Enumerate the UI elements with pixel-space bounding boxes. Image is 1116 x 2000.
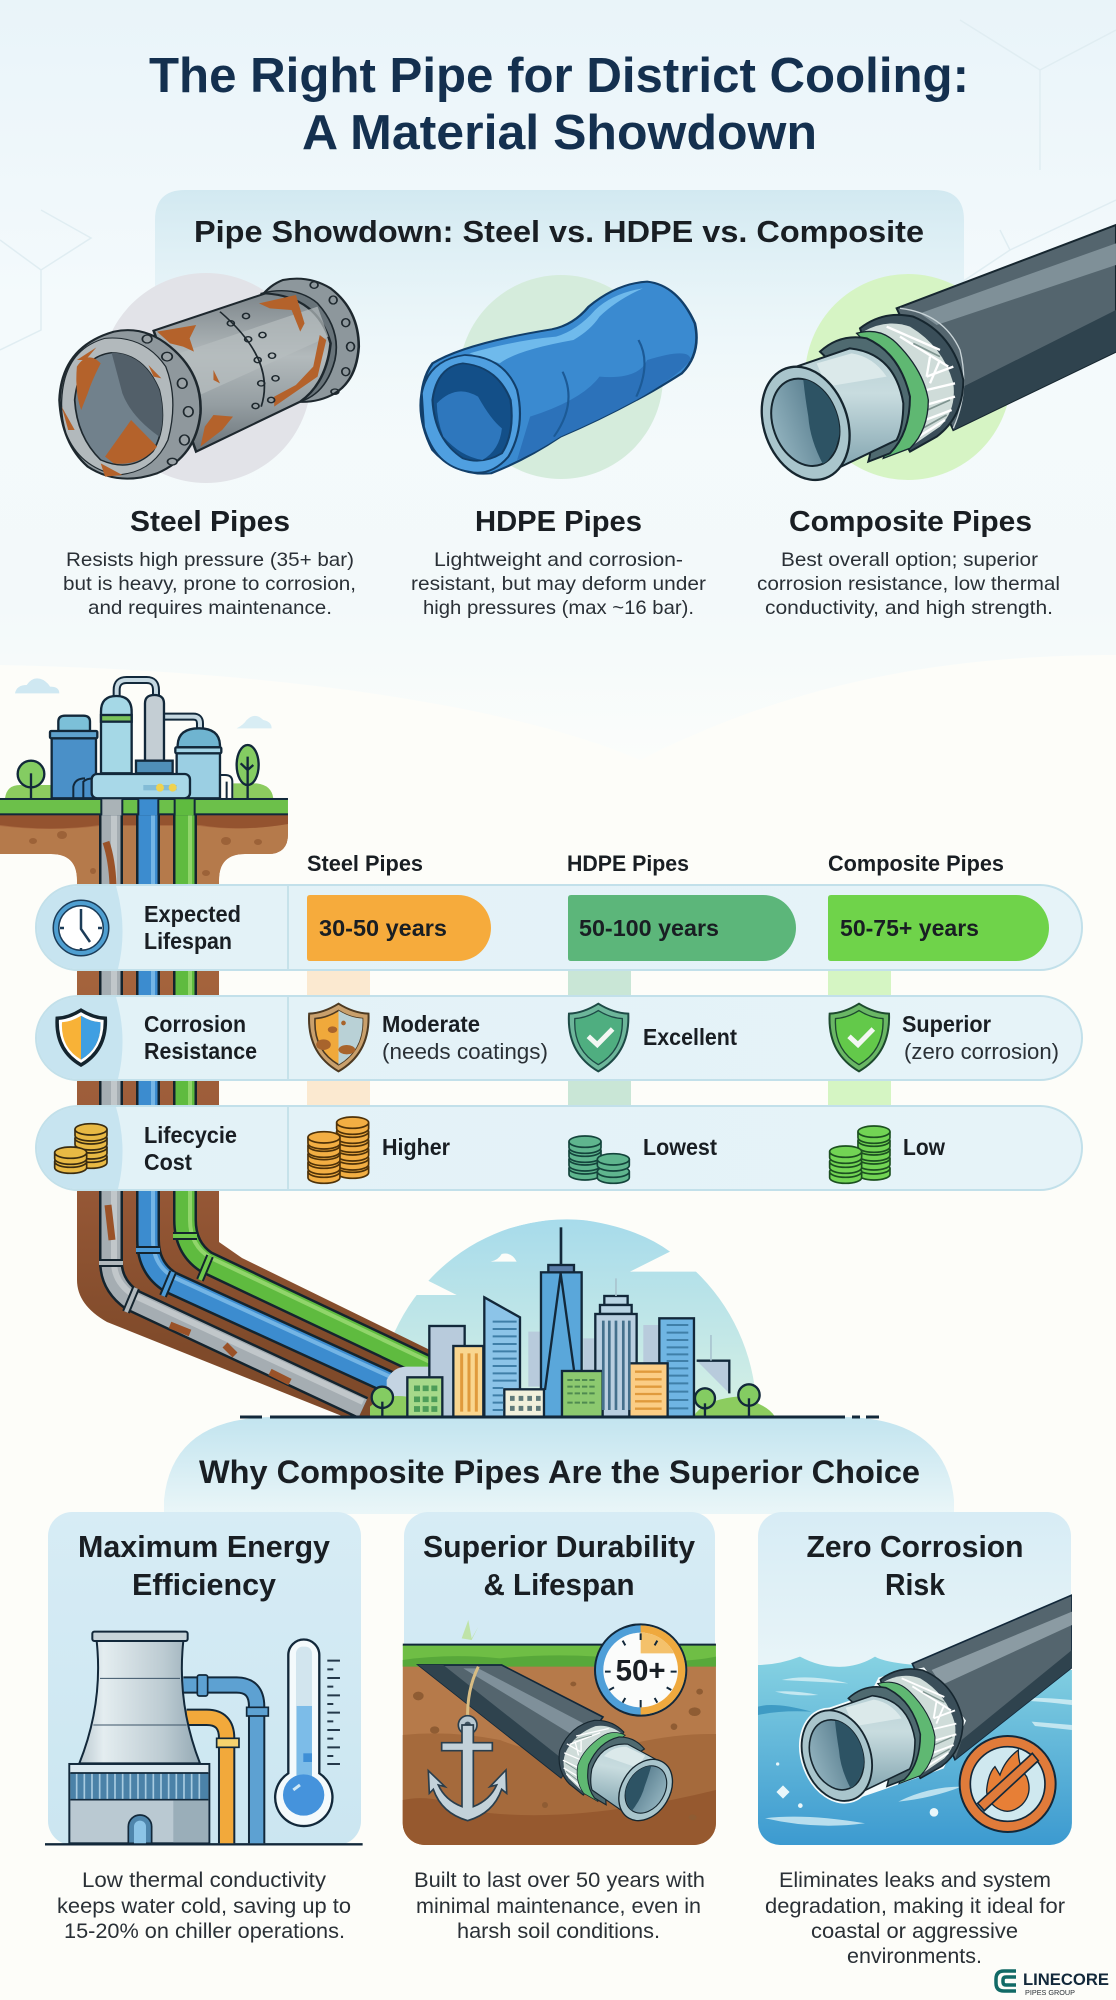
HDPE pipe illustration [421, 275, 697, 479]
row: lifecycle cost: Lowest [643, 1134, 717, 1160]
bar: composite 50-75+ years [828, 895, 1049, 961]
card text: energy: 15-20% on chiller operations. [64, 1920, 345, 1943]
row: corrosion resistance: Superior [902, 1011, 991, 1037]
composite pipes description: Composite Pipes [789, 506, 1032, 538]
bar: steel 30-50 years: 30-50 years [319, 915, 447, 941]
row: lifecycle cost: Low [903, 1134, 945, 1160]
HDPE pipes description: high pressures (max ~16 bar). [423, 597, 694, 619]
card text: corrosion: coastal or aggressive [811, 1920, 1018, 1943]
column headers: HDPE Pipes [567, 851, 689, 876]
card: maximum energy efficiency [45, 1512, 363, 1943]
card: zero corrosion risk: Risk [885, 1567, 946, 1602]
row: corrosion resistance: (zero corrosion) [904, 1039, 1059, 1064]
steel pipes description [63, 506, 356, 619]
steel pipes description: Resists high pressure (35+ bar) [66, 549, 354, 571]
column headers: Steel Pipes [307, 851, 423, 876]
illustration: buried pipe with anchor and 50+ clock: 50+ [616, 1654, 666, 1687]
composite pipes description: conductivity, and high strength. [765, 597, 1053, 619]
steel pipes description: and requires maintenance. [88, 597, 332, 619]
icon: rusted shield [309, 1004, 369, 1071]
card: zero corrosion risk [758, 1512, 1072, 1968]
HDPE pipes description: HDPE Pipes [475, 506, 642, 538]
card text: corrosion: Eliminates leaks and system [779, 1869, 1051, 1892]
composite pipes description [757, 506, 1060, 619]
gray steel underground pipe [99, 815, 363, 1408]
composite pipes description: corrosion resistance, low thermal [757, 573, 1060, 595]
icon: teal coins [569, 1136, 629, 1183]
bar: HDPE 50-100 years [568, 895, 796, 961]
row: expected lifespan: Expected [144, 901, 241, 927]
card text: energy: keeps water cold, saving up to [57, 1895, 351, 1918]
row: corrosion resistance: Moderate [382, 1011, 480, 1037]
city sky dome [370, 1210, 770, 1417]
title: The Right Pipe for District Cooling: [149, 49, 969, 103]
heading: why composite: Why Composite Pipes Are the Superior Choice [199, 1454, 920, 1490]
row: corrosion resistance: (needs coatings) [382, 1039, 548, 1064]
row: lifecycle cost: Cost [144, 1149, 192, 1175]
icon: clock [56, 903, 106, 953]
icon: half shield [57, 1010, 105, 1065]
card text: corrosion [765, 1869, 1065, 1968]
card text: corrosion: environments. [847, 1945, 982, 1968]
connector stripes between rows [307, 970, 891, 1106]
green composite underground pipe [173, 798, 430, 1368]
logo: linecore pipes group: LINECORE [1023, 1970, 1109, 1989]
icon: lime coins [830, 1126, 890, 1183]
illustration: buried pipe with anchor and 50+ clock [403, 1620, 716, 1845]
logo: linecore pipes group: PIPES GROUP [1025, 1988, 1075, 1997]
row: corrosion resistance: Resistance [144, 1038, 257, 1064]
steel pipes description: but is heavy, prone to corrosion, [63, 573, 356, 595]
pale blue upper background [0, 0, 1116, 760]
icon: orange coins [308, 1117, 369, 1183]
row: corrosion resistance: Corrosion [144, 1011, 246, 1037]
HDPE pipes description: resistant, but may deform under [411, 573, 707, 595]
card text: energy [57, 1869, 351, 1943]
city skyline buildings [370, 1227, 775, 1417]
row: lifecycle cost: Higher [382, 1134, 450, 1160]
card: superior durability [403, 1512, 716, 1943]
card: superior durability: Superior Durability [423, 1529, 696, 1564]
row: corrosion resistance: Excellent [643, 1024, 737, 1050]
ground line [240, 1416, 879, 1418]
illustration: cooling tower and thermometer [45, 1632, 363, 1844]
card text: durability: harsh soil conditions. [457, 1920, 660, 1943]
panel: why composite backdrop [164, 1417, 954, 1514]
row: expected lifespan: Lifespan [144, 928, 232, 954]
row: lifecycle cost: Lifecycie [144, 1122, 237, 1148]
HDPE pipes description [411, 506, 707, 619]
card text: durability [414, 1869, 705, 1943]
illustration: composite pipe in water with no-corrosion sign [758, 1595, 1072, 1845]
composite pipes description: Best overall option; superior [781, 549, 1039, 571]
bar: steel 30-50 years [307, 895, 491, 961]
bar: HDPE 50-100 years: 50-100 years [579, 915, 719, 941]
heading: pipe showdown: Pipe Showdown: Steel vs. HDPE vs. Composite [194, 214, 924, 249]
HDPE pipes description: Lightweight and corrosion- [434, 549, 683, 571]
title: A Material Showdown [302, 106, 817, 160]
icon: gold coins [55, 1124, 107, 1173]
column headers [307, 851, 1004, 876]
card: maximum energy efficiency: Maximum Energy [78, 1529, 331, 1564]
steel pipes description: Steel Pipes [130, 506, 290, 538]
card: superior durability: & Lifespan [484, 1567, 634, 1602]
row: expected lifespan [36, 885, 1082, 970]
steel pipe illustration [60, 273, 359, 483]
icon: green shield [569, 1004, 628, 1071]
column headers: Composite Pipes [828, 851, 1004, 876]
card text: energy: Low thermal conductivity [82, 1869, 327, 1892]
row: lifecycle cost [36, 1106, 1082, 1190]
bar: composite 50-75+ years: 50-75+ years [840, 915, 979, 941]
row: corrosion resistance [36, 996, 1082, 1080]
blue HDPE underground pipe [136, 798, 395, 1385]
icon: lime shield [830, 1004, 889, 1071]
card text: corrosion: degradation, making it ideal for [765, 1895, 1065, 1918]
underground soil and pipes [0, 798, 430, 1416]
card text: durability: Built to last over 50 years with [414, 1869, 705, 1892]
cooling plant on surface [0, 678, 288, 815]
comparison table [36, 851, 1082, 1190]
panel: pipe showdown backdrop [155, 190, 964, 440]
title [149, 49, 969, 160]
logo: linecore pipes group [996, 1970, 1109, 1997]
card: maximum energy efficiency: Efficiency [132, 1567, 277, 1602]
composite pipe illustration [747, 225, 1116, 492]
card text: durability: minimal maintenance, even in [416, 1895, 701, 1918]
card: zero corrosion risk: Zero Corrosion [806, 1529, 1024, 1564]
